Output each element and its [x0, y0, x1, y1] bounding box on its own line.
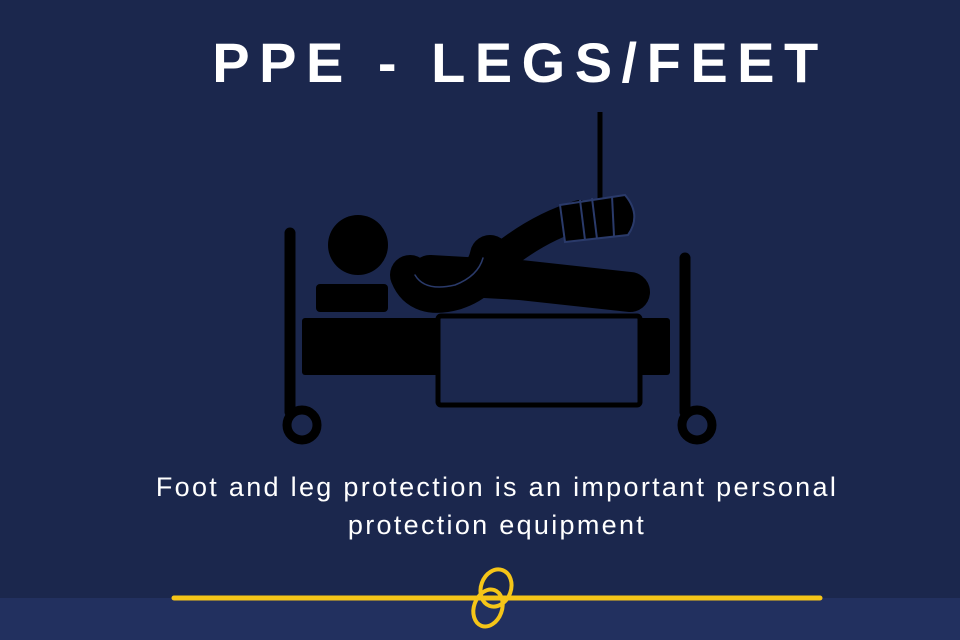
bed posts and wheels — [287, 233, 712, 440]
blanket — [438, 316, 640, 405]
caption text: protection equipment — [348, 510, 646, 540]
title: PPE - LEGS/FEET — [212, 31, 828, 94]
mattress — [302, 318, 670, 375]
caption text: Foot and leg protection is an important personal — [156, 472, 838, 502]
caption text — [156, 472, 838, 540]
cast — [560, 195, 634, 242]
pillow — [316, 284, 388, 312]
head — [328, 215, 388, 275]
body & legs — [410, 215, 630, 293]
rope — [598, 112, 602, 237]
